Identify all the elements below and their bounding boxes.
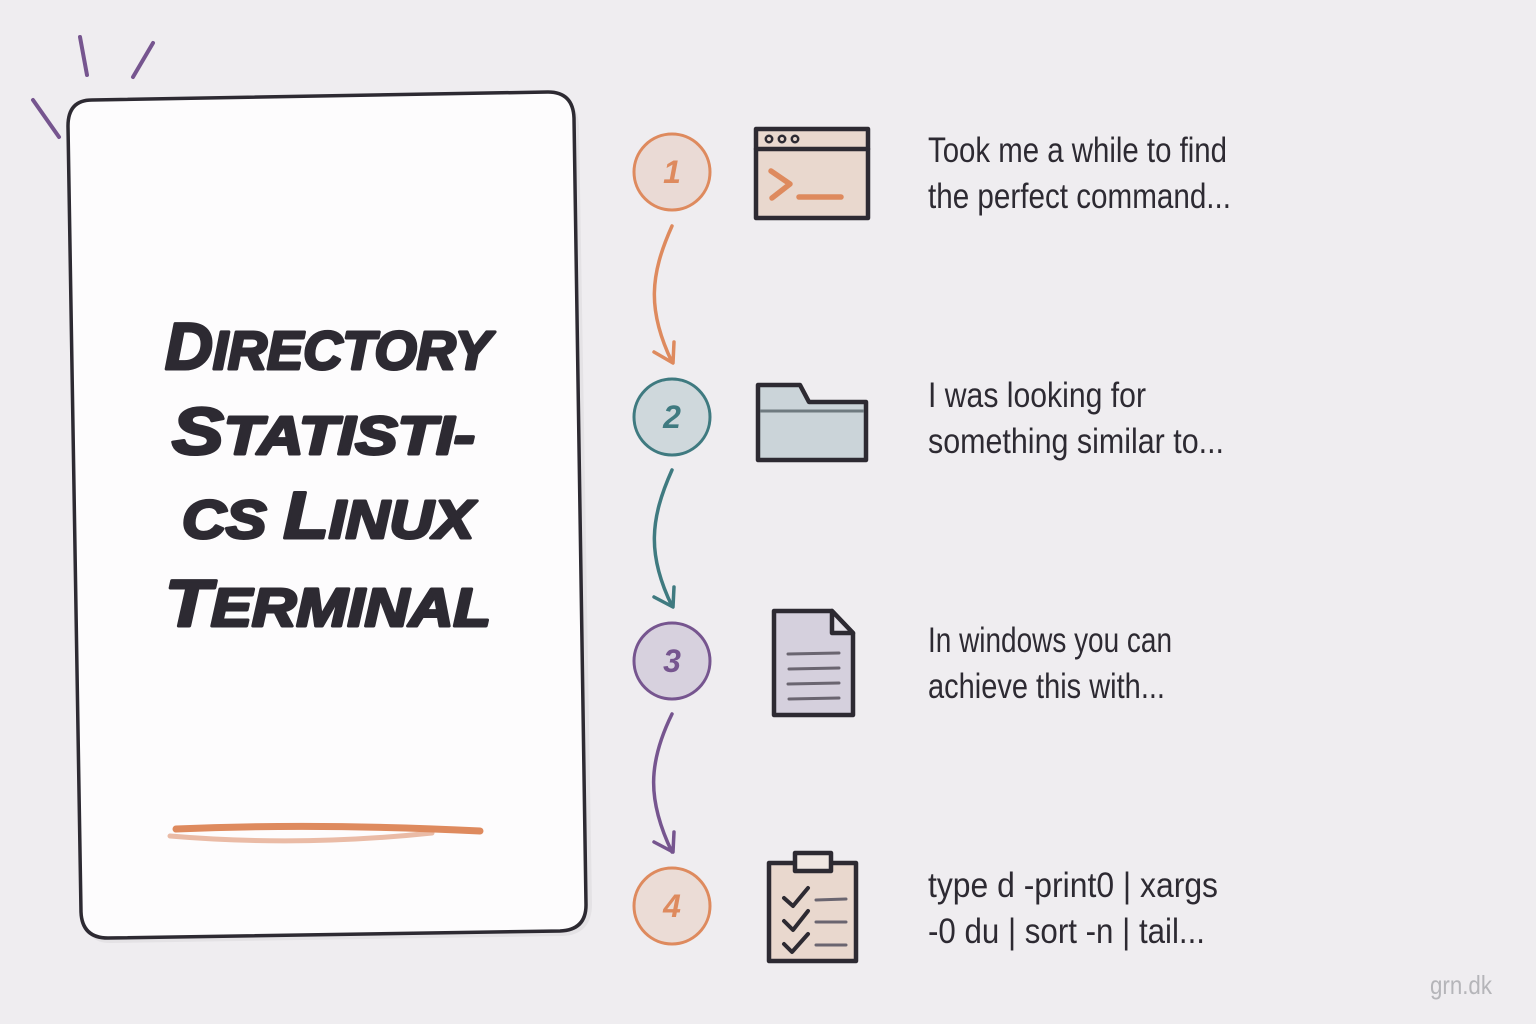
- text: step 2: I was looking for: [928, 376, 1146, 415]
- step 3 number badge: [634, 623, 710, 699]
- step 2 number badge: [634, 379, 710, 455]
- text: step 3: achieve this with...: [928, 667, 1165, 706]
- text: step 1: the perfect command...: [928, 177, 1231, 216]
- icon: document: [774, 611, 853, 715]
- text: step 3: In windows you can: [928, 621, 1172, 660]
- arrow: step 2 to step 3: [654, 470, 674, 607]
- text: step 2: [928, 376, 1224, 461]
- step 3 number badge: 3: [663, 643, 681, 679]
- step 1 number badge: [634, 134, 710, 210]
- heading: card title: CS LINUX: [182, 478, 477, 552]
- heading: card title: DIRECTORY: [165, 309, 496, 383]
- step 4 number badge: [634, 868, 710, 944]
- text: step 2: something similar to...: [928, 422, 1224, 461]
- arrow: step 3 to step 4: [654, 714, 674, 852]
- step 1 number badge: 1: [663, 154, 681, 190]
- text: step 1: [928, 131, 1231, 216]
- panel: title card: [68, 92, 592, 943]
- text: step 4: type d -print0 | xargs: [928, 866, 1218, 905]
- icon: folder: [758, 385, 866, 460]
- icon: terminal window: [756, 129, 868, 218]
- icon: emphasis sparks: [33, 37, 153, 137]
- credit: grn.dk: [1430, 970, 1493, 1000]
- heading: card title: TERMINAL: [165, 566, 491, 640]
- text: step 1: Took me a while to find: [928, 131, 1227, 170]
- icon: checklist clipboard: [769, 853, 856, 961]
- step 2 number badge: 2: [662, 399, 681, 435]
- step 4 number badge: 4: [662, 888, 681, 924]
- heading: card title: [165, 309, 496, 640]
- text: step 4: -0 du | sort -n | tail...: [928, 912, 1205, 951]
- arrow: step 1 to step 2: [654, 226, 674, 363]
- text: step 4: [928, 866, 1218, 951]
- underline accent: [170, 826, 480, 841]
- text: step 3: [928, 621, 1172, 706]
- heading: card title: STATISTI-: [172, 394, 475, 468]
